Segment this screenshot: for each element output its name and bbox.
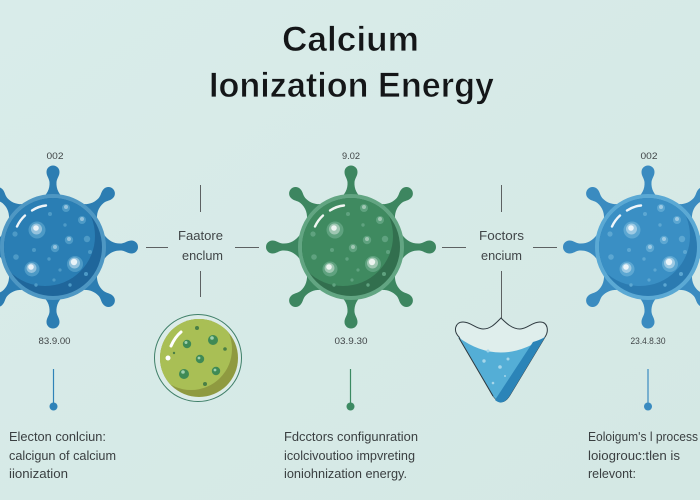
number labels: 002 xyxy=(46,151,64,162)
number labels: 03.9.30 xyxy=(334,336,368,347)
icon: green sphere xyxy=(150,308,242,402)
right blue cell xyxy=(563,166,700,328)
left factor label xyxy=(178,229,223,263)
left factor label: Faatore xyxy=(178,229,223,243)
right factor label: encium xyxy=(481,249,522,263)
right text block xyxy=(588,429,698,481)
left stem xyxy=(50,369,58,410)
center text block: icolcivoutioo impvreting xyxy=(284,448,415,463)
left text block: Electon conlciun: xyxy=(9,429,106,444)
center text block xyxy=(284,429,418,481)
number labels: 23.4.8.30 xyxy=(630,336,666,347)
center text block: ioniohnization energy. xyxy=(284,466,407,481)
number labels xyxy=(38,151,666,347)
left text block: calcigun of calcium xyxy=(9,448,116,463)
title: Calcium xyxy=(282,20,419,59)
right factor label: Foctors xyxy=(479,229,524,243)
right text block: loiogrouc:tlen is xyxy=(588,448,681,463)
title: Ionization Energy xyxy=(209,66,495,105)
right text block: relevont: xyxy=(588,466,636,481)
icon: blue beaker xyxy=(456,318,547,403)
center green cell xyxy=(266,166,436,328)
right connector lines xyxy=(442,185,557,318)
number labels: 002 xyxy=(640,151,658,162)
center text block: Fdcctors configunration xyxy=(284,429,418,444)
right stem xyxy=(644,369,652,410)
left text block: iionization xyxy=(9,466,68,481)
number labels: 83.9.00 xyxy=(38,336,70,347)
left text block xyxy=(9,429,116,481)
left blue cell xyxy=(0,166,138,328)
title xyxy=(209,20,495,105)
right factor label xyxy=(479,229,524,263)
center stem xyxy=(346,369,354,410)
left connector lines xyxy=(146,185,259,297)
left factor label: enclum xyxy=(182,249,223,263)
number labels: 9.02 xyxy=(342,151,360,162)
